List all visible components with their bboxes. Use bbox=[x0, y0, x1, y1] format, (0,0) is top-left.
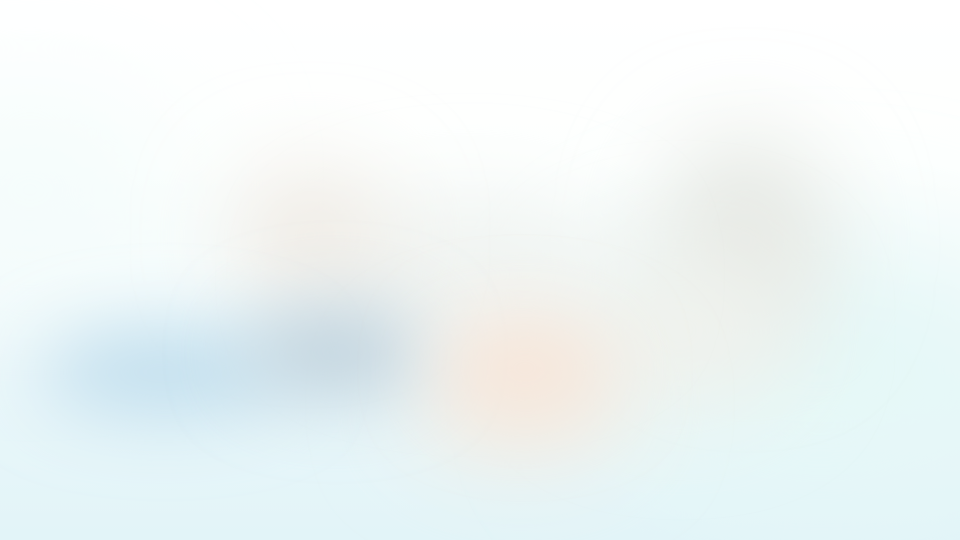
blur: grey circular haze bbox=[660, 135, 830, 345]
blur: centre grey wash bbox=[320, 205, 620, 345]
blur: right pale mint wash bbox=[600, 250, 960, 490]
blur: peach glow surround bbox=[410, 345, 630, 465]
blur: left edge mint wash bbox=[0, 100, 170, 280]
blur: grey haze lower extension bbox=[570, 250, 790, 410]
blur: beige haze centre left bbox=[235, 170, 385, 300]
blur: slate band middle bbox=[245, 308, 425, 396]
blur: blue band left bbox=[40, 332, 290, 412]
blur: peach patch bbox=[440, 322, 610, 414]
